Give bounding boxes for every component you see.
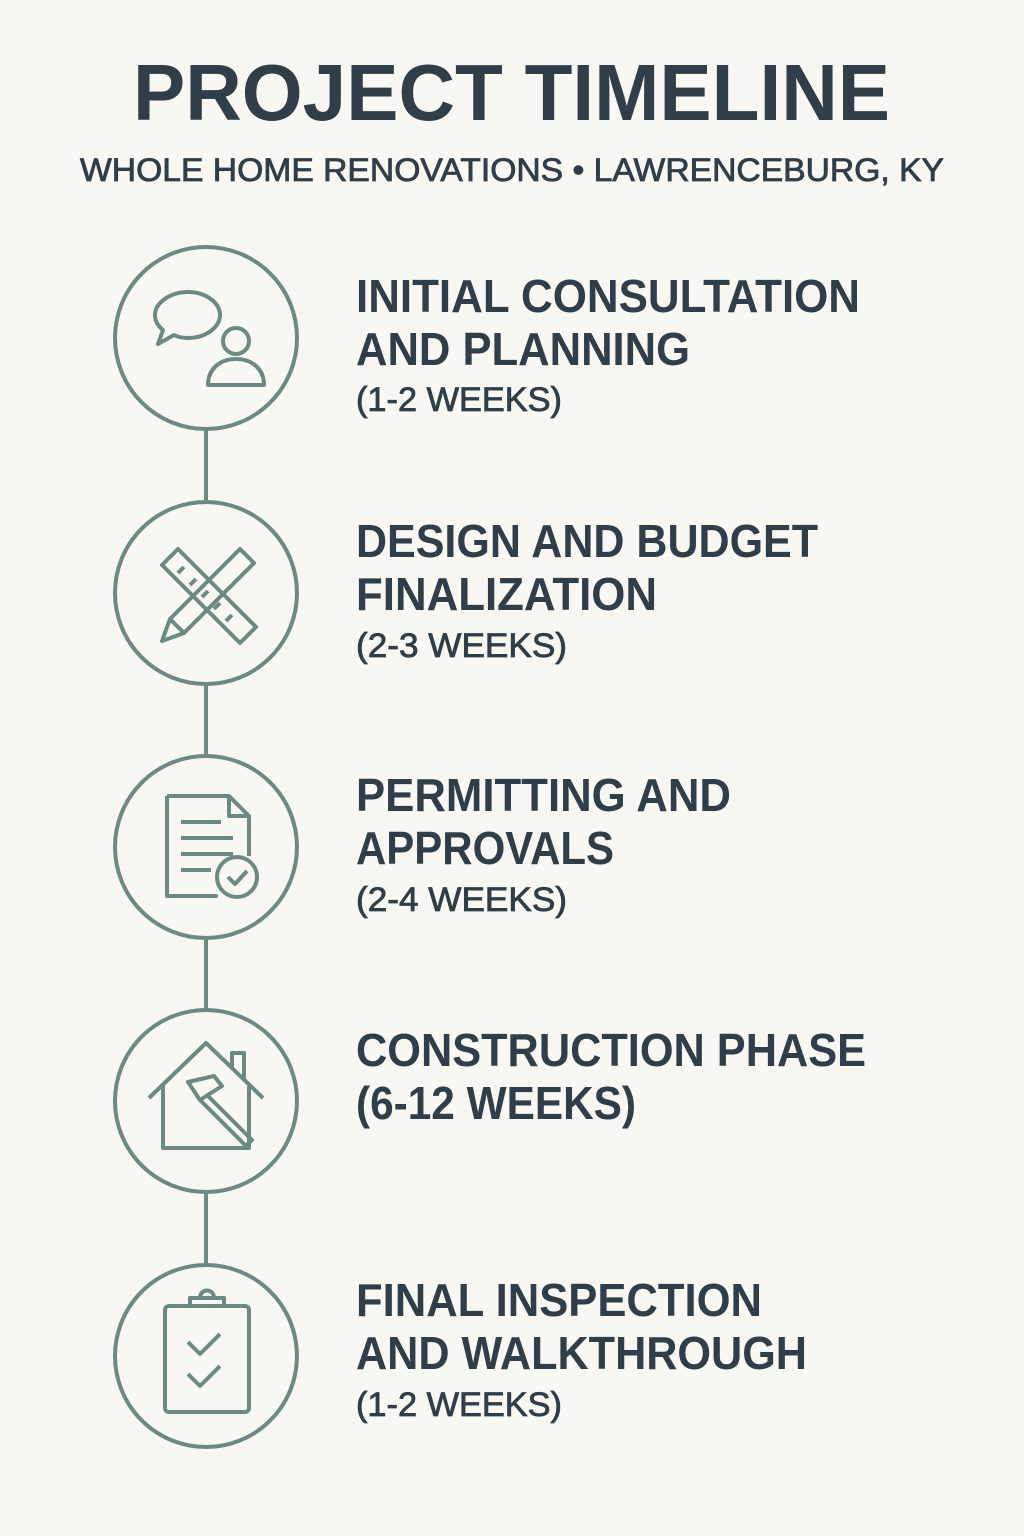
duration: (1-2 WEEKS) — [356, 381, 562, 419]
title: PROJECT TIMELINE — [133, 48, 890, 137]
icon: document with check — [115, 756, 297, 938]
timeline connector — [204, 430, 208, 1265]
heading: CONSTRUCTION PHASE — [356, 1024, 866, 1076]
icon: house with hammer — [115, 1010, 297, 1192]
duration: (1-2 WEEKS) — [356, 1386, 562, 1424]
step 3: permitting — [115, 756, 731, 938]
step 5: final inspection: AND WALKTHROUGH — [356, 1327, 807, 1379]
icon: chat and person — [115, 247, 297, 429]
step 4: construction — [115, 1010, 866, 1192]
duration: (2-3 WEEKS) — [356, 627, 567, 665]
step 1: consultation — [115, 247, 860, 429]
duration: (2-4 WEEKS) — [356, 881, 567, 919]
heading: INITIAL CONSULTATION — [356, 270, 860, 322]
heading: PERMITTING AND — [356, 769, 731, 821]
step 2: design: FINALIZATION — [356, 568, 657, 620]
duration: (6-12 WEEKS) — [356, 1077, 636, 1129]
icon: pencil and ruler — [115, 502, 297, 684]
step 3: permitting: APPROVALS — [356, 822, 614, 874]
step 2: design — [115, 502, 818, 684]
subtitle: WHOLE HOME RENOVATIONS • LAWRENCEBURG, KY — [80, 152, 944, 188]
heading: DESIGN AND BUDGET — [356, 515, 818, 567]
step 5: final inspection — [115, 1265, 807, 1447]
icon: clipboard checks — [115, 1265, 297, 1447]
step 1: consultation: AND PLANNING — [356, 323, 690, 375]
heading: FINAL INSPECTION — [356, 1274, 762, 1326]
